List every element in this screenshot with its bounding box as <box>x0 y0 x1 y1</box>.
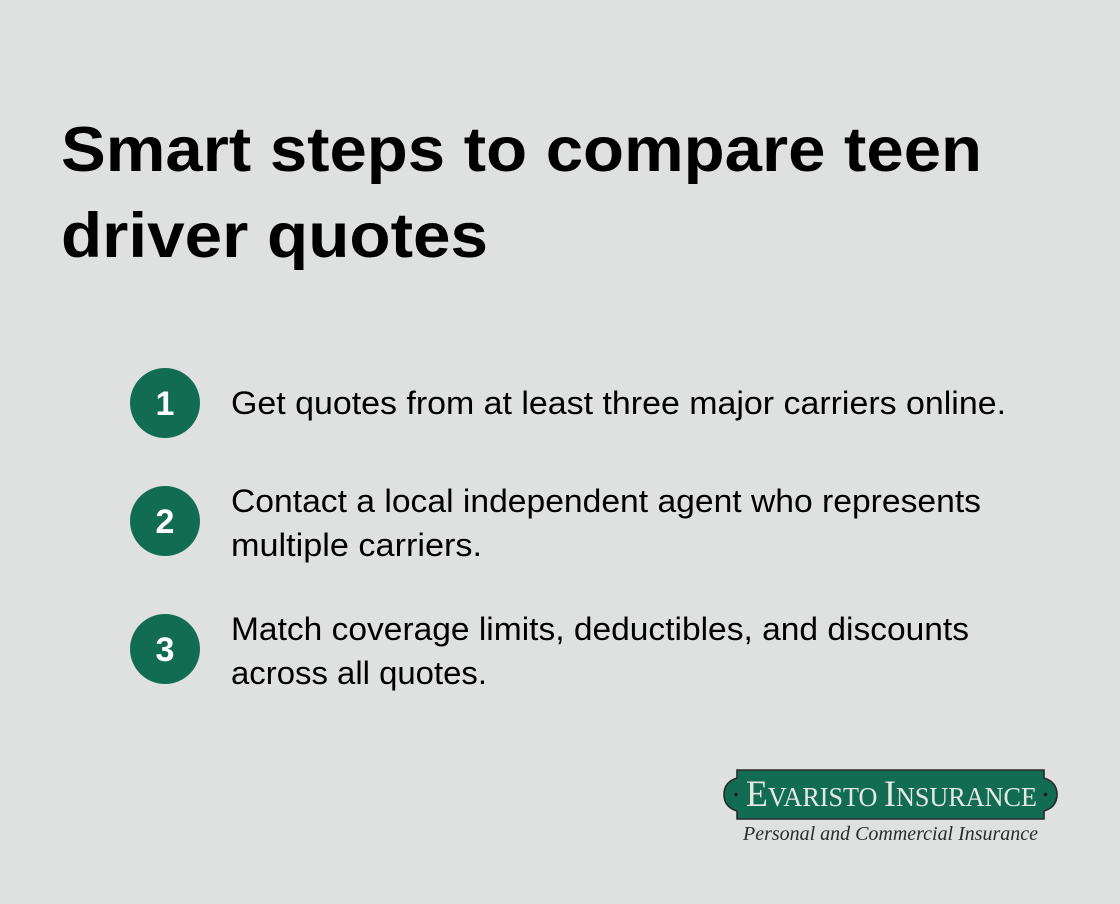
step 2 text <box>231 483 981 563</box>
step 3 number badge: 3 <box>156 631 174 669</box>
step 2 text: Contact a local independent agent who represents <box>231 483 981 519</box>
step 2 number badge <box>130 486 200 556</box>
step 3 number badge <box>130 614 200 684</box>
step 3 text <box>231 611 969 691</box>
logo dots <box>734 793 1047 796</box>
step 3 <box>130 611 969 691</box>
step 3 text: across all quotes. <box>231 655 487 691</box>
title: driver quotes <box>61 201 488 271</box>
step 3 text: Match coverage limits, deductibles, and discounts <box>231 611 969 647</box>
step 1 number badge <box>130 368 200 438</box>
logo wordmark: EVARISTO INSURANCE <box>746 774 1037 815</box>
step 2 number badge: 2 <box>156 503 174 541</box>
title: Smart steps to compare teen <box>61 115 982 185</box>
step 1 <box>130 368 1006 438</box>
step 2 <box>130 483 981 563</box>
title <box>61 115 982 271</box>
logo tagline: Personal and Commercial Insurance <box>742 823 1038 845</box>
step 1 text: Get quotes from at least three major carriers online. <box>231 385 1006 421</box>
step 1 number badge: 1 <box>156 385 174 423</box>
logo: Evaristo Insurance <box>724 770 1057 845</box>
logo green plaque <box>724 770 1057 819</box>
step 2 text: multiple carriers. <box>231 527 482 563</box>
